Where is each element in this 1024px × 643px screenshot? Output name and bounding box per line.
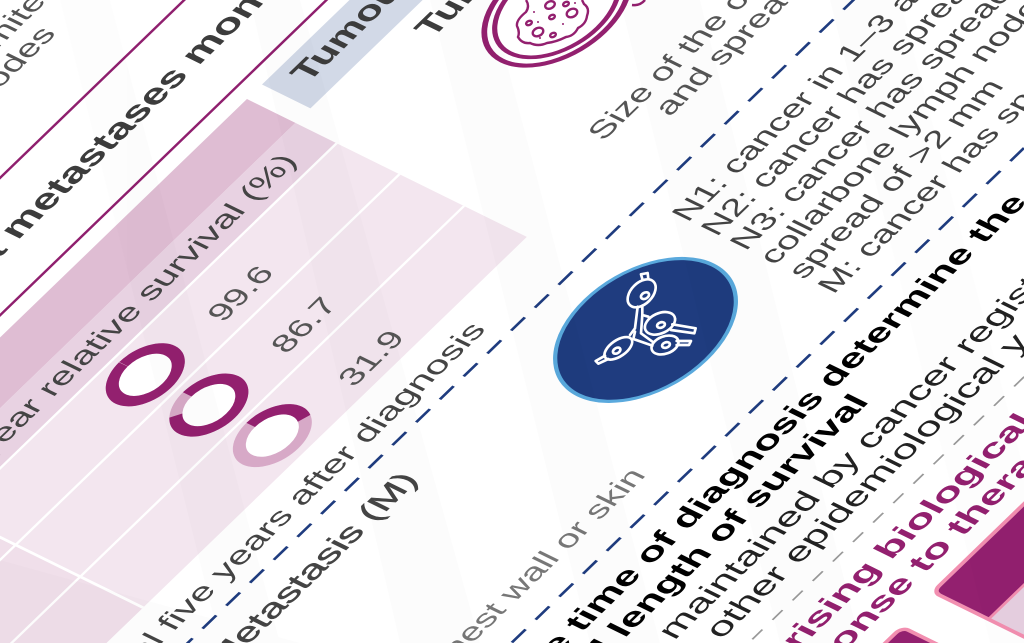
icon: neuron badge disc <box>515 233 776 427</box>
text: staging criteria list: spread of >2 mm <box>781 75 1011 283</box>
value: stage row 3: 31.9 <box>331 326 412 391</box>
donut: 86.7 percent <box>153 363 265 447</box>
divider lines: purple rules <box>0 0 504 593</box>
panel: survival table <box>0 99 527 643</box>
text: nodes note <box>0 0 97 183</box>
chip: tumour header <box>262 0 598 108</box>
icon: neurons <box>596 273 696 364</box>
icon: tumour cell rings <box>455 0 659 84</box>
dashed line: grey <box>289 0 1024 643</box>
panel: pink outlined box upper <box>933 245 1024 643</box>
donut: 31.9 percent <box>217 394 328 477</box>
donut: 99.6 percent <box>89 333 201 416</box>
value: stage row 2: 86.7 <box>264 293 345 358</box>
icon: tumour cell interior <box>517 0 645 45</box>
value: stage row 1: 99.6 <box>200 262 281 326</box>
panel: pink outlined box lower <box>667 627 1010 643</box>
